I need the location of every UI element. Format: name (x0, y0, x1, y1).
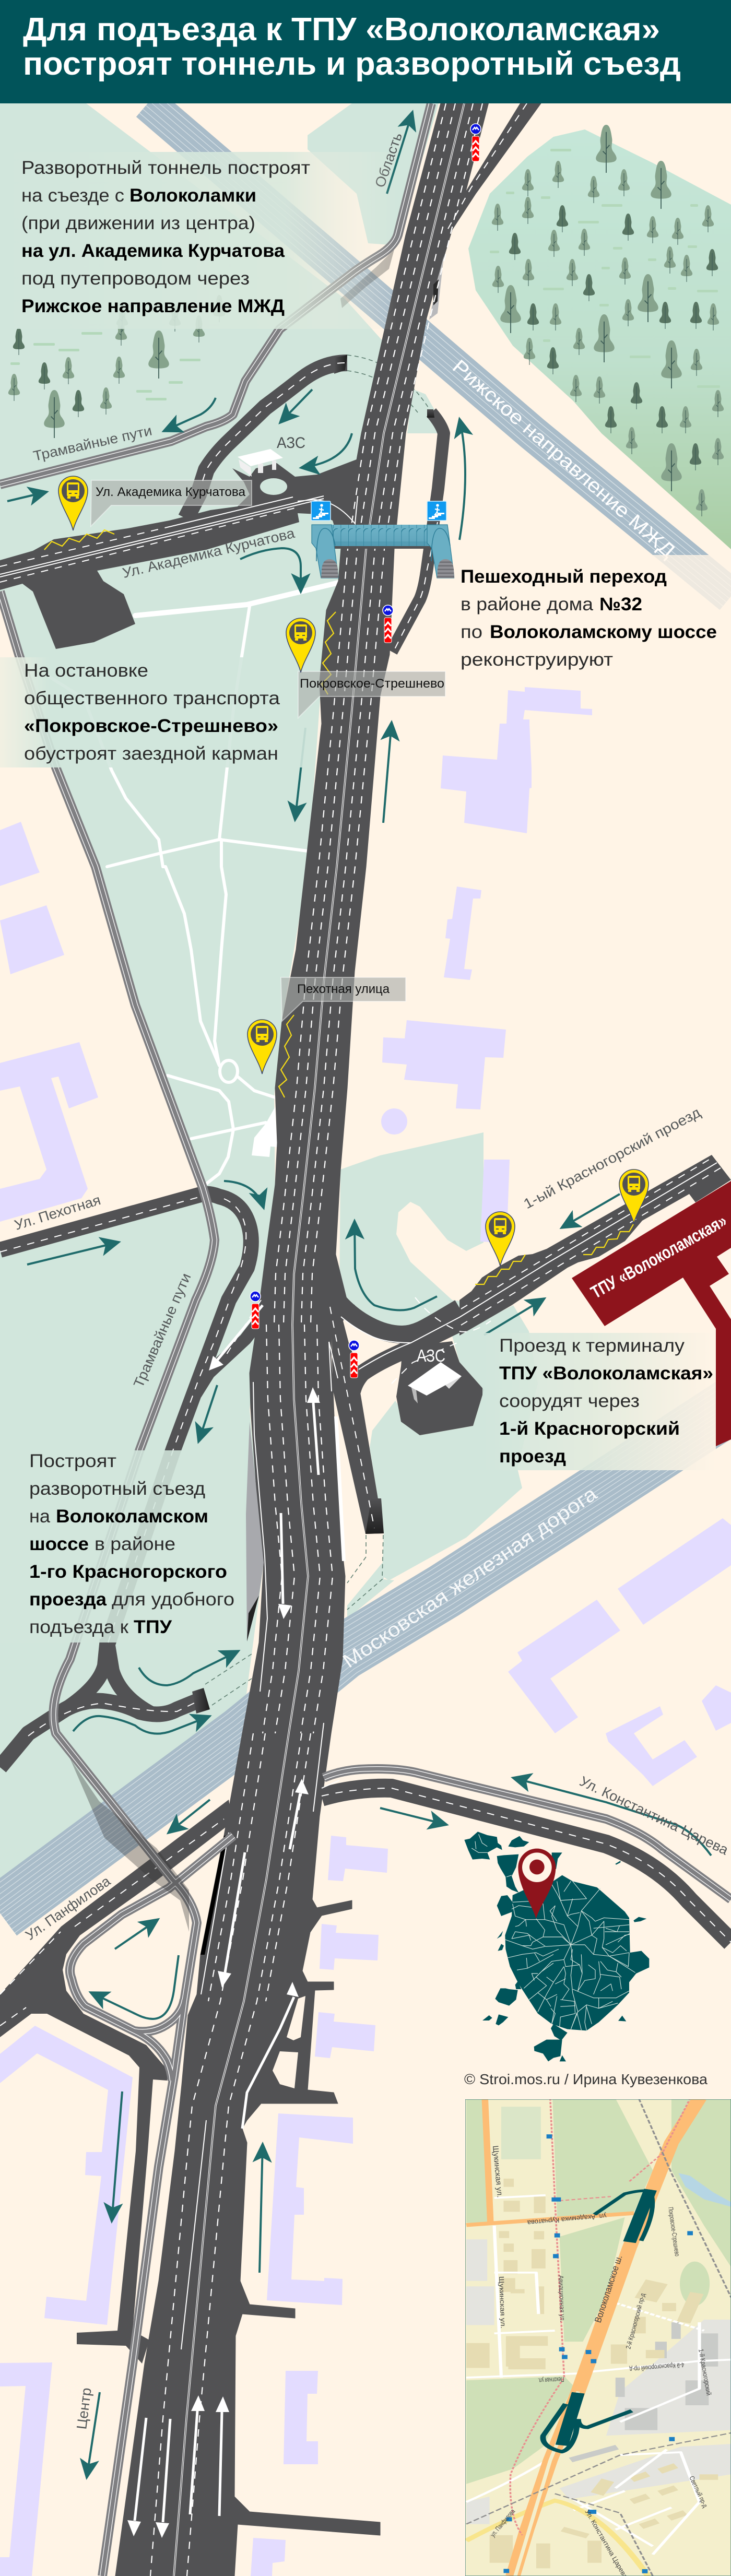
Kurchatov street and parking (0, 458, 366, 649)
road and railway labels: Ул. Академика Курчатова (121, 525, 297, 581)
road and railway labels: Центр (74, 2387, 95, 2430)
text panel: passage to terminal: проезд (499, 1446, 566, 1467)
text panel: U-turn exit: подъезда к (29, 1617, 129, 1637)
inset street map: ул. Академика Курчатова (527, 2212, 607, 2227)
inset street map: 4-й Красногорский пр-д (629, 2361, 685, 2373)
inset street map: Светлый пр-д (688, 2475, 709, 2509)
text panel: passage to terminal: соорудят через (499, 1391, 640, 1411)
pedestrian overpass (312, 525, 454, 578)
road and railway labels: Область (372, 131, 405, 190)
islands and gas stations (238, 449, 462, 1403)
text panel: bus stop pocket: На остановке (24, 660, 148, 681)
railway: Riga direction (148, 103, 731, 596)
text panel: U-turn tunnel: (при движении из центра) (21, 213, 255, 233)
text panel: U-turn exit: Построят (29, 1451, 116, 1471)
text panel: U-turn exit: ТПУ (134, 1617, 172, 1637)
text panel: U-turn tunnel: Волоколамки (129, 185, 256, 206)
text panel: U-turn tunnel: под путепроводом через (21, 268, 250, 289)
road and railway labels: АЗС (417, 1346, 445, 1365)
road and railway labels: Трамвайные пути (32, 422, 154, 464)
road and railway labels: Ул. Панфилова (22, 1873, 114, 1943)
text panel: U-turn exit: проезда (29, 1589, 107, 1610)
road and railway labels: Рижское направление МЖД (448, 356, 679, 562)
road and railway labels: Московская железная дорога (339, 1483, 602, 1672)
text panel: U-turn exit: Волоколамском (56, 1506, 208, 1527)
text panel: U-turn tunnel (0, 152, 397, 329)
text panel: bus stop pocket: общественного транспорта (24, 688, 280, 708)
highway shoulders, wedges and tunnel portals (192, 256, 444, 1955)
cream city block left of tram line (0, 591, 203, 1250)
inset street map: Авиационная ул. (557, 2275, 567, 2322)
road and railway labels: Ул. Константина Царева (577, 1773, 731, 1858)
text panel: U-turn exit (0, 1450, 244, 1643)
text panel: U-turn exit: для удобного (112, 1589, 234, 1610)
text panel: U-turn exit: 1-го Красногорского (29, 1562, 227, 1582)
text panel: pedestrian crossing: Пешеходный переход (461, 566, 667, 587)
text panel: pedestrian crossing: по (461, 622, 482, 642)
text panel: pedestrian crossing: №32 (599, 594, 642, 615)
header band (0, 0, 731, 103)
text panel: passage to terminal: 1-й Красногорский (499, 1419, 680, 1439)
trees: forest and park (8, 125, 724, 516)
text panel: bus stop pocket: «Покровское-Стрешнево» (24, 716, 278, 736)
yellow bus stop zigzags (44, 530, 633, 1284)
TPU terminal building (572, 1181, 731, 1446)
large white direction arrows (127, 1305, 320, 2538)
inset street map: Волоколамское ш. (593, 2254, 624, 2324)
inset street map: Щукинская ул. (498, 2276, 507, 2329)
inset street map: ул. Панфилова (489, 2507, 516, 2538)
title (23, 11, 681, 82)
text panel: U-turn exit: шоссе (29, 1534, 89, 1554)
ramp flare to first Krasnogorsky passage (331, 1254, 384, 1534)
text panel: U-turn tunnel: Рижское направление МЖД (21, 296, 285, 316)
park green areas (0, 103, 538, 1913)
forest area (468, 129, 731, 549)
road and railway labels: 1-ый Красногорский проезд (521, 1104, 703, 1212)
inset street map: Пехотная ул. (538, 2376, 564, 2385)
text panel: pedestrian crossing: в районе дома (461, 594, 594, 615)
text panel: U-turn exit: разворотный съезд (29, 1479, 205, 1499)
road signs (250, 124, 481, 1378)
Volokolamskoe highway (115, 103, 541, 2576)
title: построят тоннель и разворотный съезд (23, 46, 681, 82)
road and railway labels: АЗС (277, 434, 305, 452)
inset street map: Покровское-Стрешнево (667, 2206, 681, 2256)
text panel: U-turn tunnel: на съезде с (21, 185, 124, 206)
bus stop label: Kurchatova: Ул. Академика Курчатова (96, 485, 246, 499)
dashed tunnel outlines (205, 355, 428, 1705)
text panel: passage to terminal: Проезд к терминалу (499, 1336, 685, 1356)
park footpaths (49, 583, 338, 1185)
title: Для подъезда к ТПУ «Волоколамская» (23, 11, 660, 48)
icon: bus stop pins (58, 476, 649, 1266)
road and railway labels: Трамвайные пути (131, 1271, 194, 1390)
text panel: U-turn exit: на (29, 1506, 51, 1527)
bus stop label: Pokrovskoe-Streshnevo: Покровское-Стрешнево (300, 677, 444, 691)
bus stop label: Pokrovskoe-Streshnevo (298, 671, 445, 718)
text panel: passage to terminal (482, 1333, 716, 1470)
bus stop label: Pekhotnaya: Пехотная улица (297, 982, 390, 996)
text panel: U-turn tunnel: на ул. Академика Курчатова (21, 241, 285, 261)
bus stop label: Kurchatova (91, 480, 252, 526)
road and railway labels: Ул. Пехотная (13, 1192, 102, 1233)
overpass shadows (70, 250, 394, 1932)
text panel: U-turn exit: в районе (95, 1534, 175, 1554)
railway: Moscow railroad (0, 1405, 731, 1913)
Moscow districts locator map (464, 1831, 649, 2061)
inset street map: 2-й Красногорский пр-д (624, 2292, 646, 2350)
side roads (0, 363, 731, 2364)
inset street map: 1-й Красногорский (697, 2348, 713, 2396)
text panel: pedestrian crossing: реконструируют (461, 649, 613, 670)
text panel: pedestrian crossing: Волоколамскому шоссе (490, 622, 717, 642)
text panel: pedestrian crossing (454, 555, 731, 678)
text panel: U-turn tunnel: Разворотный тоннель построят (21, 158, 310, 178)
icon: location pin (518, 1849, 556, 1919)
inset street map: Щукинская ул. (491, 2145, 504, 2198)
buildings (0, 687, 731, 2576)
credit line: © Stroi.mos.ru / Ирина Кувезенкова (464, 2071, 708, 2087)
text panel: bus stop pocket: обустроят заездной карман (24, 743, 278, 764)
bus stop label: Pekhotnaya (281, 977, 406, 1021)
text panel: bus stop pocket (0, 657, 308, 767)
inset street map (465, 2098, 731, 2576)
cream gaps and islands on highway (273, 103, 520, 2088)
icon: pedestrian crossing signs (311, 501, 446, 521)
text panel: passage to terminal: ТПУ «Волоколамская» (499, 1363, 713, 1384)
